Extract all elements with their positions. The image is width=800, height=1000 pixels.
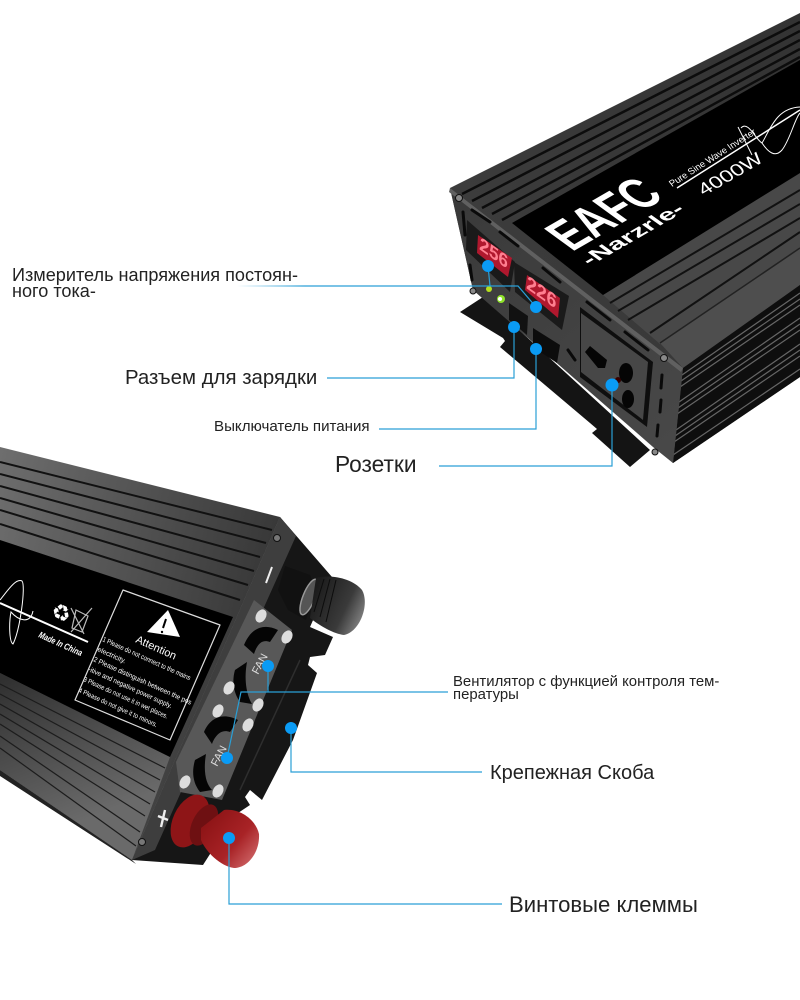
label: screw terminals: Винтовые клеммы bbox=[509, 892, 698, 917]
warning text: 2 Please distinguish between the pos bbox=[92, 656, 193, 707]
label: fan: Вентилятор с функцией контроля тем- bbox=[453, 674, 719, 690]
recycle icon: ♻ bbox=[48, 598, 74, 630]
warning text: 1 Please do not connect to the mains bbox=[101, 636, 192, 682]
inverter photo: bottom unit bbox=[0, 447, 365, 868]
inverter photo: top unit bbox=[449, 13, 800, 467]
warning triangle bbox=[147, 610, 180, 637]
fan screws bbox=[177, 607, 295, 800]
callout: sockets bbox=[335, 378, 618, 477]
DC voltmeter: 256 bbox=[478, 233, 509, 274]
label panel: warnings bbox=[0, 540, 233, 757]
disposal icon bbox=[71, 608, 92, 634]
label: sockets: Розетки bbox=[335, 451, 416, 477]
attention box: Attention bbox=[134, 634, 178, 663]
label: power switch: Выключатель питания bbox=[214, 418, 370, 435]
product type: Pure Sine Wave Inverter bbox=[667, 127, 758, 189]
label: DC voltmeter: ного тока- bbox=[12, 281, 96, 301]
bottom unit body bbox=[0, 447, 280, 864]
warning text: electricity. bbox=[96, 646, 127, 665]
top unit body bbox=[450, 13, 800, 463]
positive terminal bbox=[163, 788, 259, 868]
fan 2 bbox=[193, 716, 238, 792]
charging port bbox=[509, 303, 528, 335]
callout: mounting bracket bbox=[285, 722, 655, 784]
label: charging port: Разъем для зарядки bbox=[125, 367, 317, 389]
AC voltmeter bbox=[514, 262, 569, 330]
fan 1 bbox=[233, 627, 278, 704]
sine graphic bbox=[0, 581, 88, 644]
callout: screw terminals bbox=[223, 832, 698, 917]
warning text: 4 Please do not give it to minors. bbox=[77, 687, 158, 729]
DC voltmeter bbox=[466, 220, 515, 292]
warning text: 3 Please do not use it in wet places. bbox=[82, 676, 169, 721]
AC voltmeter: 226 bbox=[525, 271, 558, 314]
callout: DC voltmeter bbox=[12, 260, 542, 313]
indicator lights bbox=[486, 286, 505, 303]
label: mounting bracket: Крепежная Скоба bbox=[490, 762, 655, 784]
warning text bbox=[77, 636, 193, 729]
attention box bbox=[75, 590, 220, 740]
callout: temperature-controlled fan bbox=[221, 660, 719, 764]
minus sign bbox=[266, 567, 272, 583]
negative terminal bbox=[278, 566, 365, 635]
fan 2: FAN bbox=[209, 744, 230, 768]
made in china: Made In China bbox=[37, 630, 84, 658]
sine graphic bbox=[677, 107, 800, 188]
label: fan: пературы bbox=[453, 687, 519, 703]
mounting bracket: top unit bbox=[460, 297, 650, 467]
wattage: 4000W bbox=[694, 149, 768, 199]
end panel with bracket bbox=[132, 517, 333, 865]
plus sign bbox=[158, 810, 168, 827]
screws bbox=[456, 194, 668, 455]
fan 1: FAN bbox=[250, 652, 271, 676]
callout: power switch bbox=[214, 343, 542, 435]
callout: charging port bbox=[125, 321, 520, 389]
brand name: EAFC bbox=[533, 169, 676, 259]
front panel: top unit bbox=[449, 188, 683, 463]
warning text: -itive and negative power supply. bbox=[87, 666, 173, 710]
label panel: brand bbox=[512, 60, 800, 295]
brand subtitle: -Narzrle- bbox=[575, 200, 690, 269]
AC socket bbox=[580, 307, 653, 427]
power switch bbox=[533, 328, 560, 363]
label: DC voltmeter: Измеритель напряжения постоян- bbox=[12, 265, 298, 285]
